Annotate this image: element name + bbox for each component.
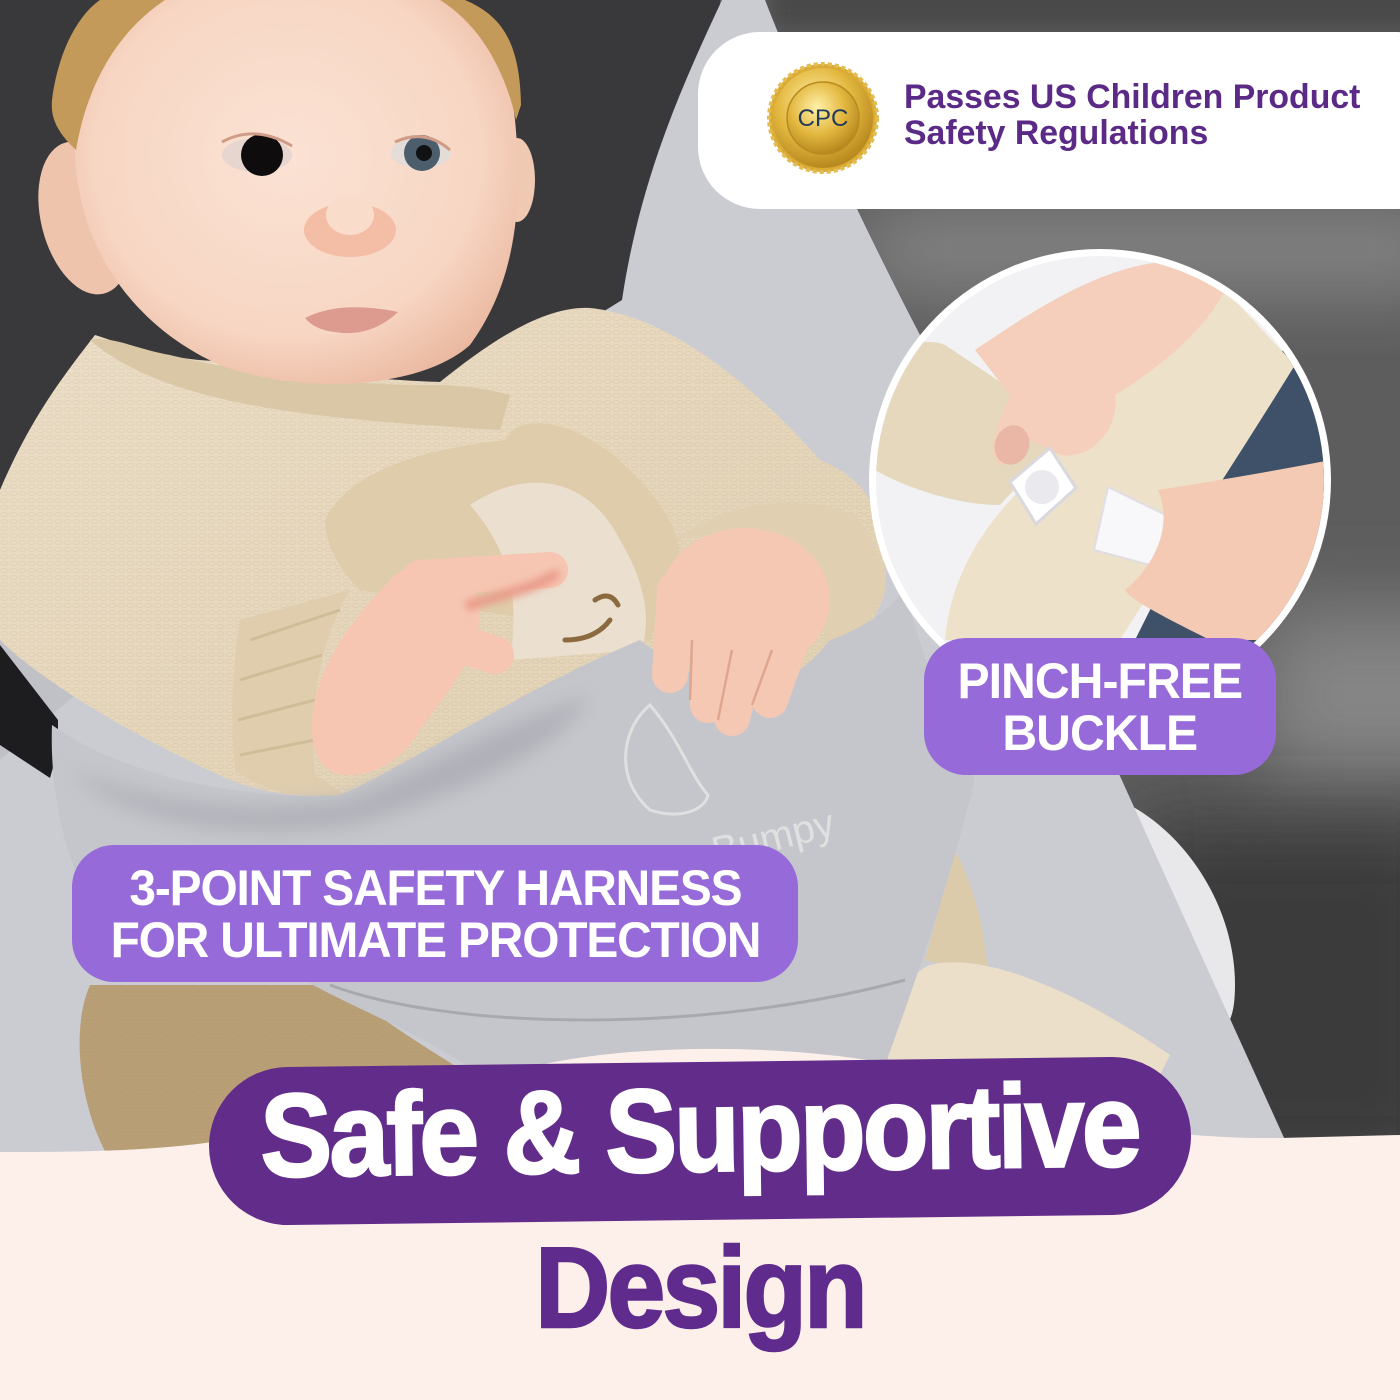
title pill: Safe & Supportive: Safe & Supportive — [260, 1060, 1140, 1202]
right hand — [660, 528, 830, 720]
eyes — [222, 134, 451, 176]
pants — [80, 850, 1170, 1160]
left hand — [312, 562, 555, 775]
sweater — [0, 308, 886, 797]
callout: 3-point safety harness: 3-POINT SAFETY HARNESS — [129, 860, 741, 916]
banner text — [904, 78, 1360, 152]
callout: pinch-free buckle: BUCKLE — [1003, 704, 1197, 760]
buckle strap — [0, 645, 58, 778]
certification banner — [698, 32, 1400, 209]
baby head — [23, 0, 535, 384]
icon: CPC gold seal — [767, 62, 879, 174]
callout: 3-point safety harness — [72, 845, 798, 982]
banner text: Safety Regulations — [904, 114, 1208, 152]
headband — [52, 0, 165, 150]
nose — [304, 195, 396, 257]
callout: pinch-free buckle: PINCH-FREE — [958, 652, 1242, 708]
inset ring and photo — [869, 249, 1331, 647]
harness — [52, 590, 975, 1075]
icon: CPC gold seal: CPC — [798, 105, 848, 132]
harness logo: ppyBumpy — [645, 801, 839, 890]
title second line: Design: Design — [535, 1225, 865, 1352]
seat shell — [0, 0, 1285, 1160]
banner text: Passes US Children Product — [904, 78, 1360, 116]
bottom cream wave — [0, 1049, 1400, 1400]
harness logo — [626, 705, 839, 890]
mouth — [305, 307, 398, 333]
callout: 3-point safety harness: FOR ULTIMATE PROTECTION — [110, 912, 760, 968]
suction foot — [1100, 790, 1235, 1060]
callout: pinch-free buckle — [924, 638, 1276, 775]
